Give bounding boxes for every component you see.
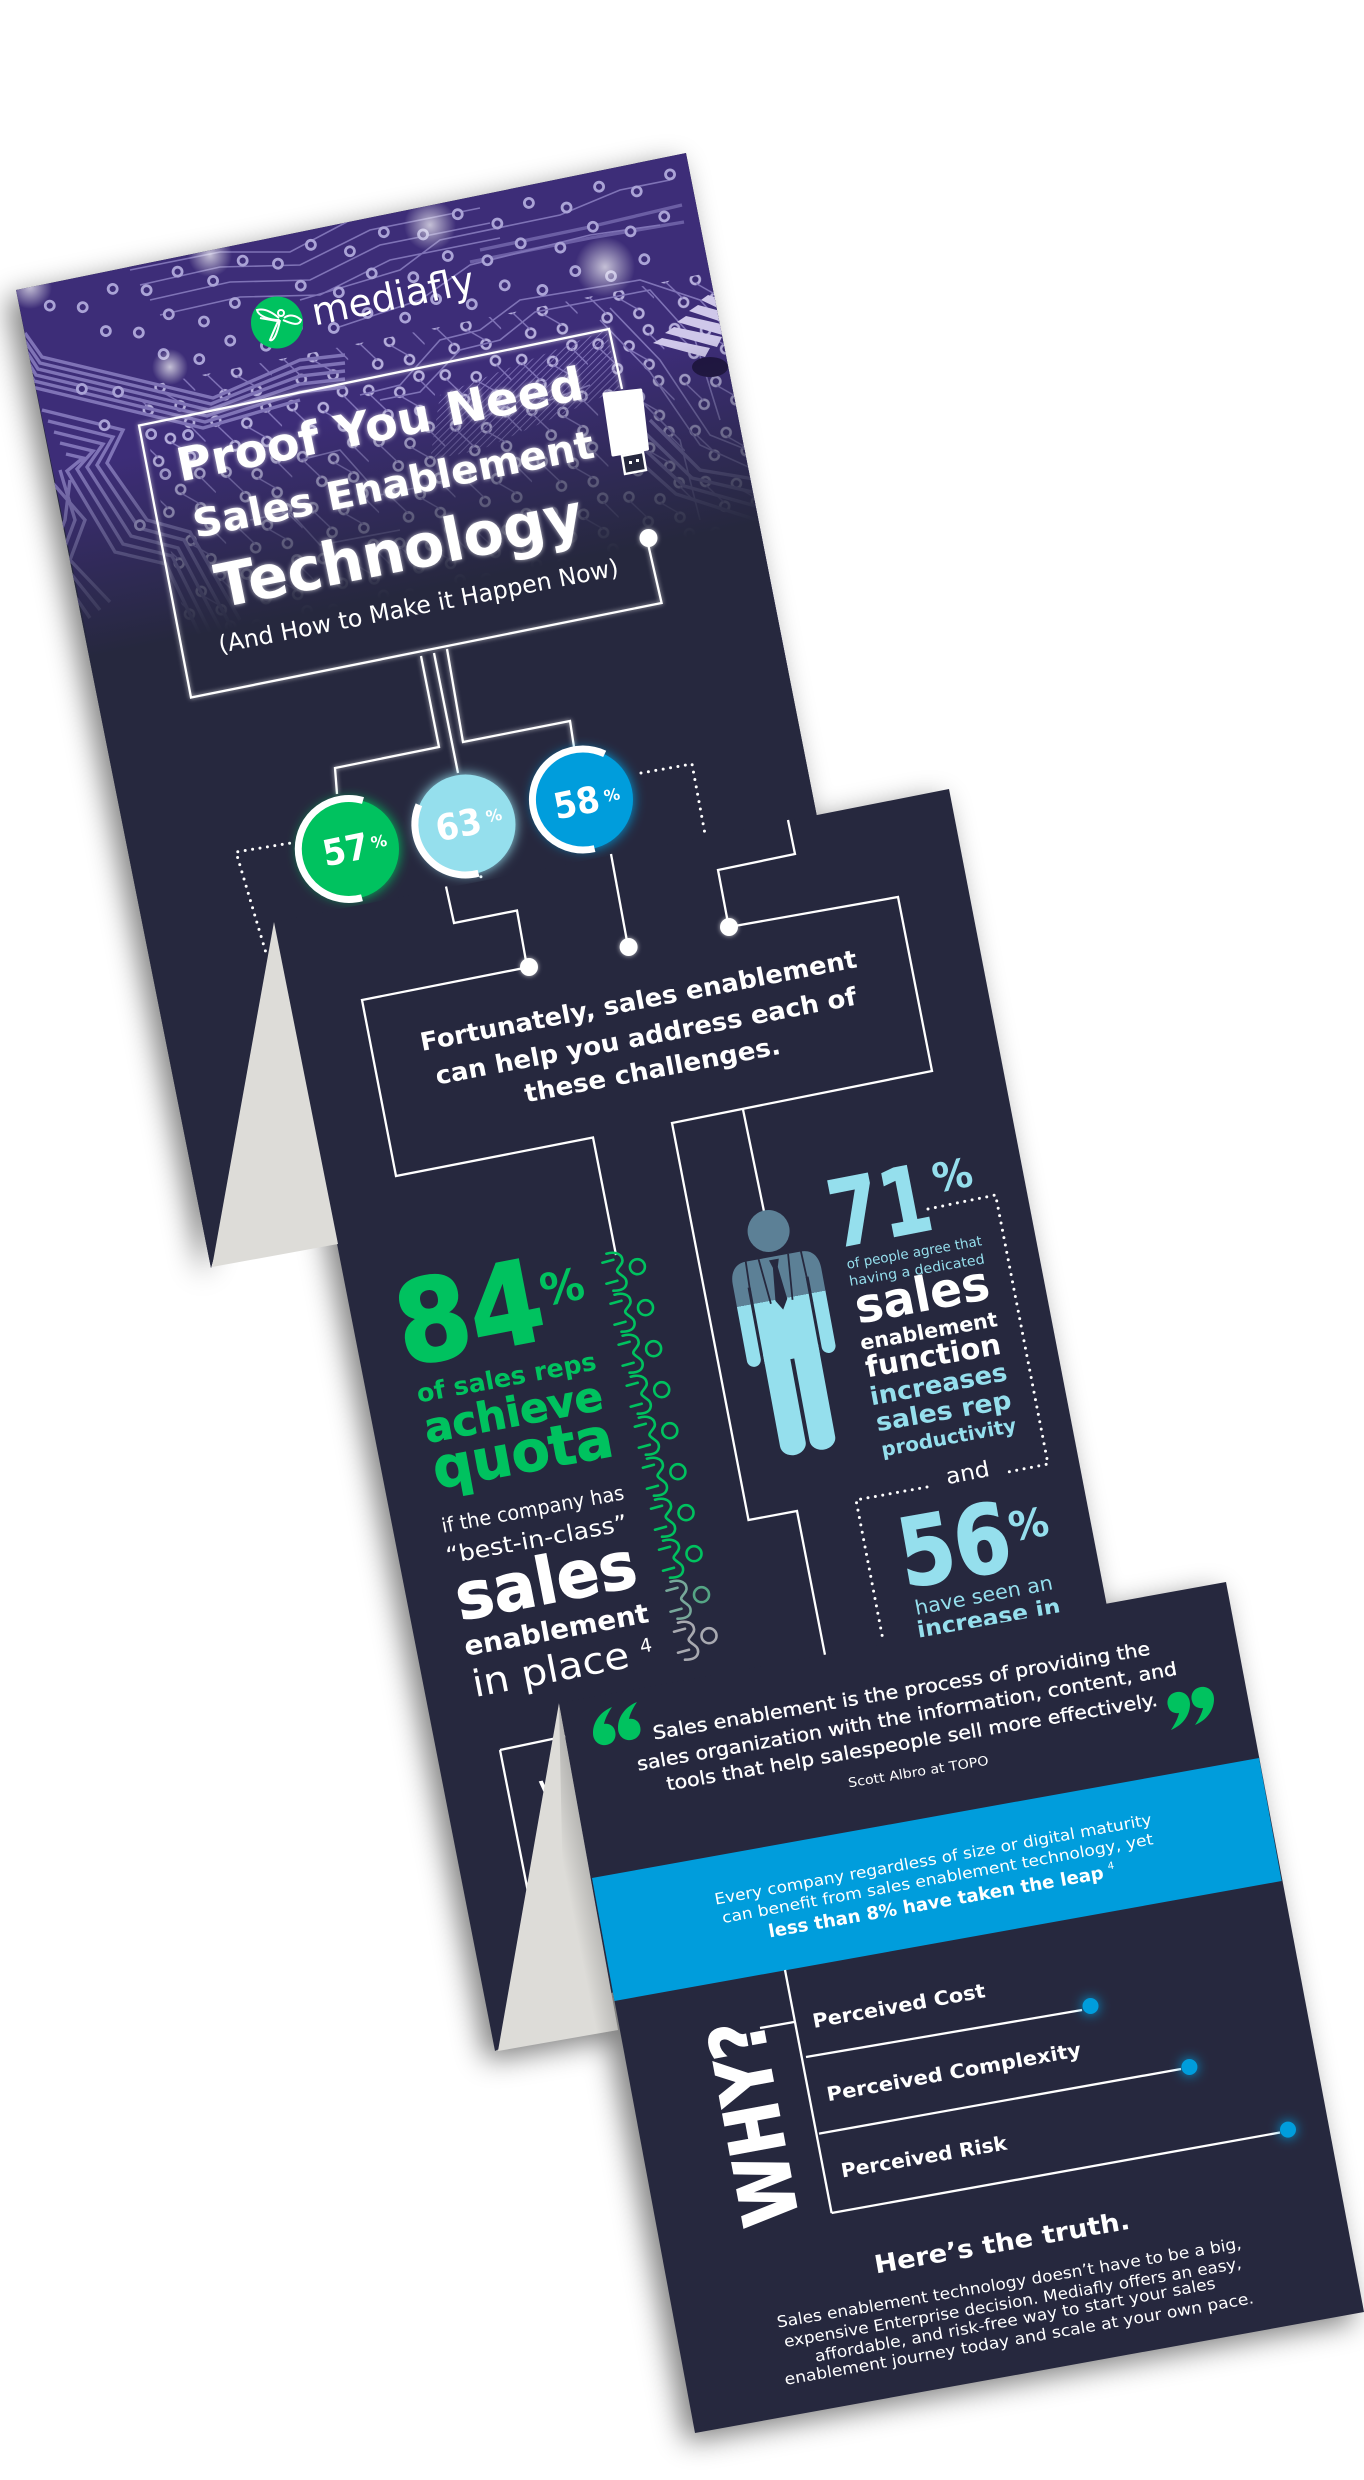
quote text: sales organization with the information, content, and [635, 1659, 1179, 1776]
reasons tree [760, 1970, 1296, 2213]
quote text: Scott Albro at TOPO [847, 1754, 990, 1791]
stat: 84% of sales reps: sales [449, 1528, 643, 1636]
stat: 84% of sales reps [384, 1234, 654, 1706]
heading: Technology [209, 480, 589, 623]
stat: 84% of sales reps: quota [427, 1405, 618, 1502]
stat circle: 58%: % [602, 784, 622, 806]
blue banner: can benefit from sales enablement technology, yet [721, 1830, 1155, 1927]
stat: 71% productivity: sales rep [874, 1385, 1014, 1437]
stat: 84% of sales reps: enablement [462, 1598, 651, 1663]
stat: 84% of sales reps: if the company has [440, 1480, 626, 1538]
stat: 71% productivity [820, 1145, 1048, 1472]
stat: 56% increase: have seen an [913, 1570, 1055, 1620]
stat: 71% productivity: productivity [879, 1414, 1019, 1461]
stat: 71% productivity: of people agree that [845, 1233, 983, 1273]
panel background [274, 789, 1110, 2051]
stat circle: 63% [415, 774, 516, 875]
stat: 71% productivity: having a dedicated [848, 1251, 986, 1290]
heading: Sales Enablement [189, 423, 598, 548]
blue banner: Every company regardless of size or digital maturity [713, 1811, 1153, 1909]
stat: 84% of sales reps: in place [468, 1633, 633, 1706]
heading [172, 356, 598, 623]
connector lines from title to stats [335, 649, 574, 794]
stat: 71% productivity: sales [850, 1255, 994, 1336]
reasons tree: Perceived Risk [839, 2131, 1010, 2183]
stat circle: 57% [298, 798, 399, 899]
stat: 84% of sales reps: “best-in-class” [444, 1511, 630, 1570]
frame lines [139, 329, 662, 698]
icon: opening quotation mark [593, 1702, 641, 1745]
stat circle: 58%: 58 [550, 779, 603, 828]
body text [775, 2234, 1255, 2389]
reasons tree: Perceived Complexity [825, 2038, 1083, 2106]
stat circle: 58% [532, 749, 633, 850]
heading: here's the truth: Here’s the truth. [872, 2206, 1132, 2279]
panel background [16, 153, 820, 1268]
stat: 84% of sales reps: achieve [420, 1372, 607, 1453]
blue banner: less than 8% have taken the leap [767, 1863, 1105, 1942]
stat: 56% increase [856, 1483, 1062, 1644]
blue banner [592, 1758, 1282, 2001]
panel: sales enablement challenges card [212, 789, 1110, 2051]
dotted connectors [236, 764, 705, 953]
quote text: Sales enablement is the process of providing the [651, 1639, 1152, 1744]
stat: 56% increase: 56 [890, 1483, 1019, 1610]
connector lines and dots [362, 820, 932, 1892]
fade to dark [55, 346, 817, 1268]
icon: closing quotation mark [1167, 1687, 1214, 1730]
fold: paper underside of third card [498, 1703, 618, 2051]
body text: Sales enablement technology doesn’t have to be a big, [775, 2234, 1243, 2332]
stat: 71% productivity: function [863, 1327, 1003, 1384]
stat: 84% of sales reps: 84 [384, 1234, 555, 1393]
reasons tree: Perceived Cost [811, 1979, 987, 2033]
heading: WHY?: WHY? [691, 2013, 817, 2233]
text: fortunately: these challenges. [522, 1031, 783, 1108]
connector lines and dots: W [538, 1774, 566, 1803]
stat: 71% productivity: increases [867, 1357, 1009, 1411]
circuit board background image [16, 153, 817, 1268]
text: fortunately [418, 944, 860, 1108]
panel background [559, 1582, 1364, 2433]
body text: affordable, and risk-free way to start your sales [813, 2274, 1217, 2366]
stat: 71% productivity: 71 [820, 1145, 940, 1269]
icon: usb connector [604, 390, 648, 474]
subtitle: (And How to Make it Happen Now) [216, 554, 621, 659]
panel: header card with circuit board and statistics [16, 153, 817, 1268]
body text: expensive Enterprise decision. Mediafly offers an easy, [782, 2253, 1243, 2351]
decorative green squiggle column [602, 1253, 716, 1660]
blue banner: 4 [1107, 1861, 1115, 1873]
text: and: and [944, 1457, 992, 1490]
text: fortunately: Fortunately, sales enablement [418, 944, 859, 1057]
quote text [635, 1639, 1179, 1795]
stat circle: 63%: % [484, 805, 504, 827]
stat: 71% productivity: enablement [858, 1307, 999, 1355]
stat circle: 57%: % [369, 831, 389, 853]
stat circle: 57%: 57 [319, 826, 372, 875]
stat: 84% of sales reps: % [536, 1259, 589, 1317]
stat: 84% of sales reps: 4 [638, 1634, 654, 1658]
logo: mediafly [251, 258, 478, 348]
quote text: tools that help salespeople sell more effectively. [665, 1690, 1159, 1795]
panel: why card [559, 1582, 1364, 2433]
heading: Proof You Need [172, 356, 588, 492]
stat: 56% increase: increase in [915, 1594, 1062, 1644]
icon: businessman figure [721, 1202, 854, 1460]
circuit pads [653, 295, 722, 357]
text: fortunately: can help you address each of [433, 982, 860, 1090]
body text: enablement journey today and scale at your own pace. [783, 2288, 1255, 2389]
wordmark: mediafly [308, 258, 478, 334]
stat: 71% productivity: % [928, 1150, 977, 1203]
stat: 84% of sales reps: of sales reps [414, 1347, 599, 1408]
fold: paper underside [212, 922, 338, 1267]
icon: dragonfly logo [251, 296, 303, 348]
title block with glowing frame [139, 329, 662, 698]
stat: 56% increase: % [1005, 1499, 1052, 1551]
stat circle: 63%: 63 [432, 801, 485, 850]
